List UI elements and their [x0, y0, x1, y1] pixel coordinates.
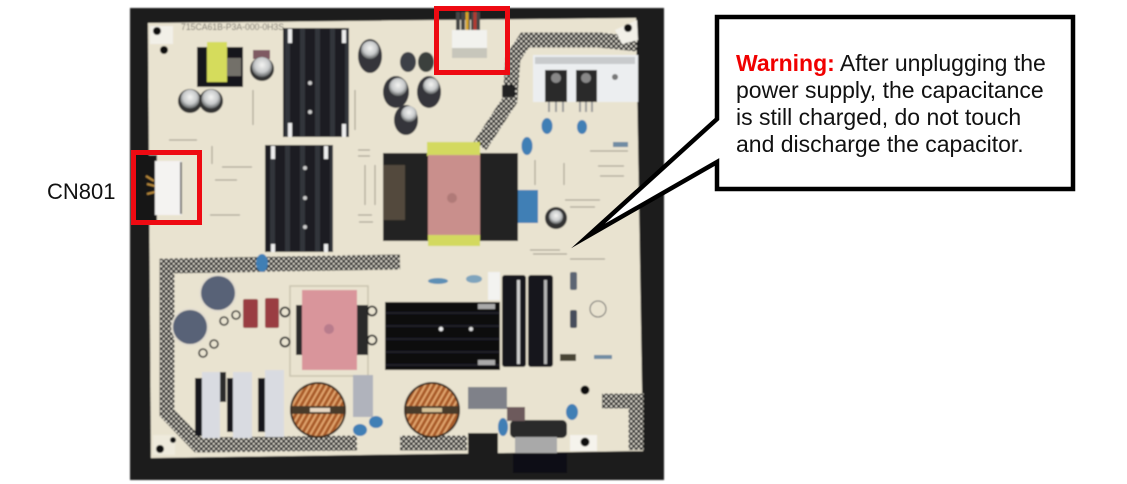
- warning text: is still charged, do not touch: [736, 104, 1021, 130]
- silkscreen traces: [169, 90, 628, 259]
- red film capacitors: [243, 298, 279, 328]
- small blue capacitors: [256, 118, 628, 436]
- hatched traces: [167, 40, 637, 450]
- diodes and RoHS mark: [560, 272, 606, 361]
- large black heat sink: [385, 302, 500, 370]
- warning text: Warning:: [736, 50, 835, 76]
- toroid coil left: [290, 382, 346, 438]
- toroid coil right: [404, 382, 460, 438]
- warning text: and discharge the capacitor.: [736, 131, 1024, 157]
- small IC: [502, 85, 515, 97]
- small transformer: [197, 42, 243, 87]
- AC inlet and connector bottom: [468, 407, 567, 473]
- large black capacitors: [502, 275, 553, 367]
- white heat sinks bottom left: [195, 370, 284, 438]
- mounting holes: [150, 20, 638, 455]
- warning text: power supply, the capacitance: [736, 77, 1044, 103]
- grey box capacitor left: [353, 375, 373, 417]
- warning callout: [588, 17, 1073, 236]
- photo dark background: [130, 8, 664, 480]
- white heat sink with transistors: [533, 55, 638, 112]
- highlight box: CN801 connector: [134, 152, 200, 222]
- varistor discs: [171, 274, 240, 357]
- center transformer: [383, 142, 518, 246]
- callout bubble with pointer: [588, 17, 1073, 236]
- photo: power supply board: [130, 8, 664, 480]
- silkscreen part number: 715CA61B-P3A-000-0H3S: [181, 22, 284, 32]
- connector top: [452, 12, 487, 58]
- highlight box: top connector: [436, 8, 508, 72]
- blue box capacitor: [518, 190, 538, 223]
- connector CN801 body: [133, 155, 182, 222]
- heat sink upper: [283, 28, 349, 137]
- label: CN801: CN801: [47, 179, 115, 204]
- grey box capacitor right: [468, 387, 507, 409]
- warning text: After unplugging the: [835, 50, 1046, 76]
- white capacitor: [488, 272, 500, 300]
- heat sink lower: [265, 145, 333, 252]
- electrolytic capacitors: [178, 39, 567, 229]
- lower pink transformer: [280, 286, 376, 376]
- circuit board: [148, 18, 643, 458]
